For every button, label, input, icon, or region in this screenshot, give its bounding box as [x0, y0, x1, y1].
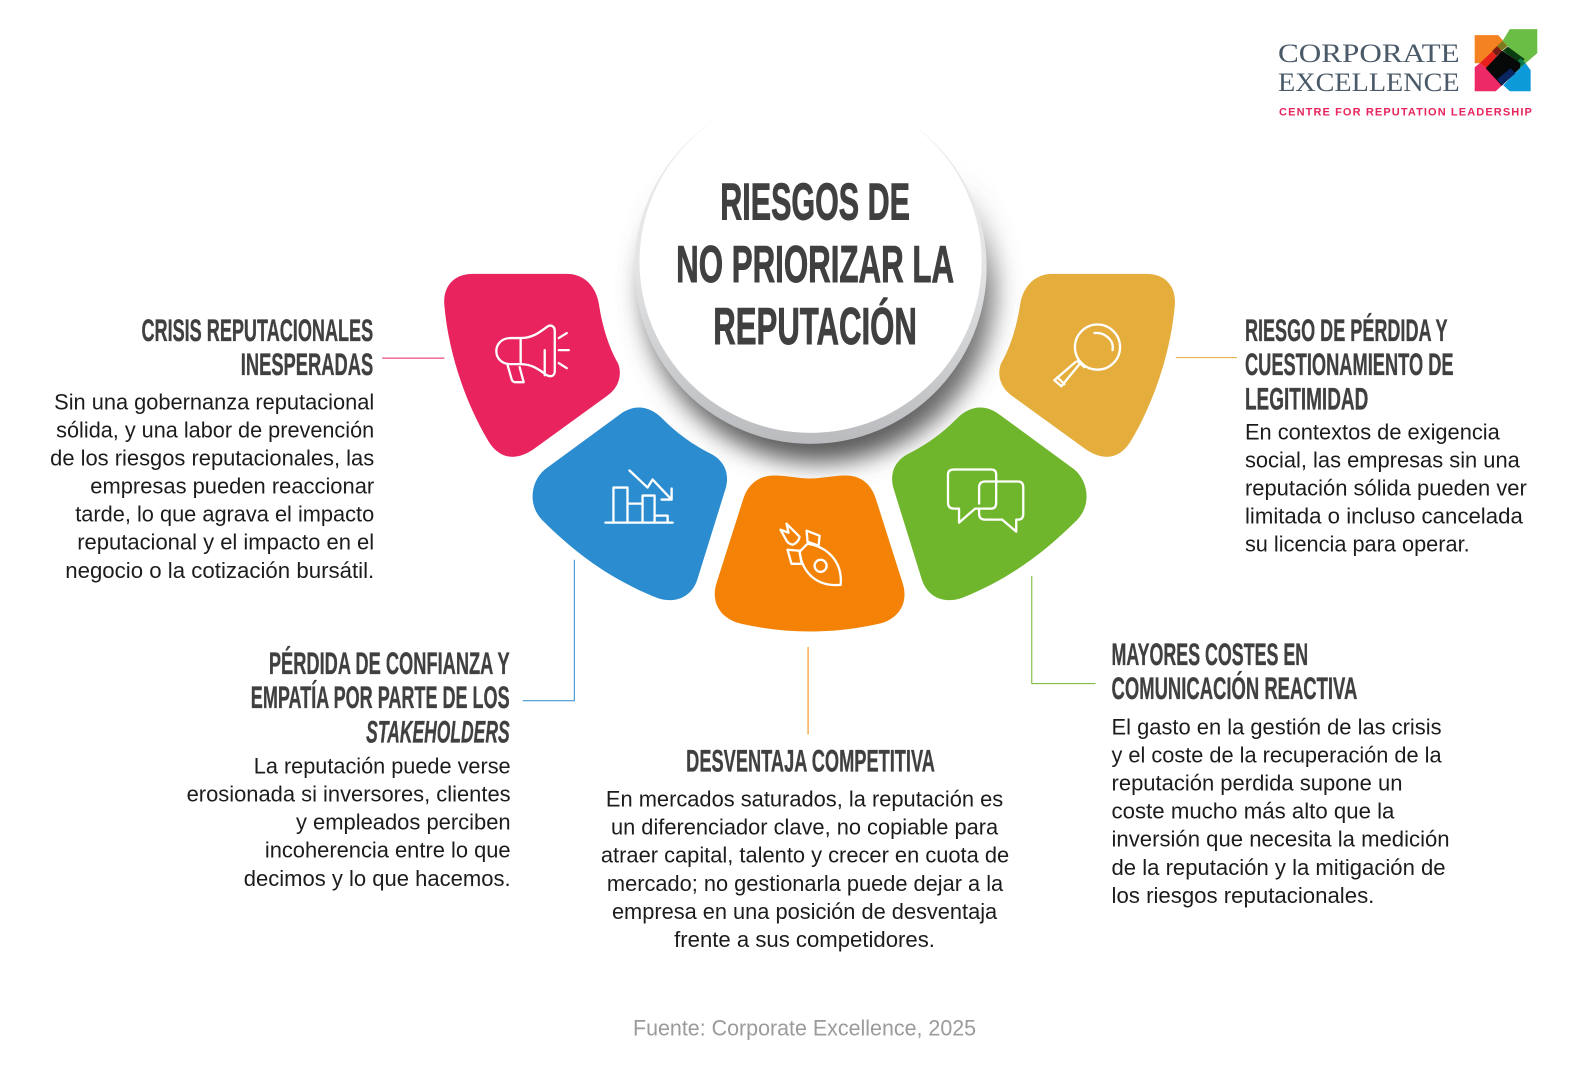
- body: costes: coste mucho más alto que la: [1112, 799, 1395, 824]
- title: REPUTACIÓN: [713, 298, 917, 356]
- heading: confianza: [251, 646, 510, 749]
- panel: legitimidad shape: [999, 274, 1175, 457]
- text block: confianza: [187, 646, 511, 891]
- title: RIESGOS DE: [720, 174, 910, 232]
- heading: desventaja: DESVENTAJA COMPETITIVA: [686, 743, 935, 778]
- heading: costes: COMUNICACIÓN REACTIVA: [1112, 670, 1357, 706]
- title: [676, 174, 954, 356]
- text block: crisis: [50, 313, 374, 583]
- icon: speech bubbles: [948, 469, 1023, 532]
- icon: rocket: [780, 524, 841, 585]
- body: confianza: y empleados perciben: [296, 810, 511, 835]
- body: crisis: [50, 389, 374, 583]
- source note: Fuente: Corporate Excellence, 2025: [633, 1015, 976, 1040]
- heading: crisis: INESPERADAS: [241, 347, 373, 382]
- connector: crisis: [382, 357, 444, 359]
- heading: legitimidad: [1245, 313, 1454, 416]
- body: crisis: de los riesgos reputacionales, las: [50, 445, 374, 470]
- body: costes: inversión que necesita la medición: [1112, 827, 1450, 852]
- heading: legitimidad: LEGITIMIDAD: [1245, 381, 1368, 416]
- body: crisis: tarde, lo que agrava el impacto: [75, 502, 374, 527]
- connector: confianza: [523, 560, 574, 701]
- text block: costes: [1112, 637, 1450, 908]
- body: confianza: La reputación puede verse: [254, 753, 511, 778]
- connector: costes: [1032, 576, 1095, 684]
- icon: magnifier: [1054, 325, 1120, 386]
- body: costes: y el coste de la recuperación de la: [1112, 742, 1442, 767]
- body: desventaja: empresa en una posición de desventaja: [612, 899, 998, 924]
- connector: legitimidad: [1176, 357, 1237, 359]
- body: costes: El gasto en la gestión de las crisis: [1112, 714, 1442, 739]
- body: legitimidad: En contextos de exigencia: [1245, 419, 1500, 444]
- heading: confianza: EMPATÍA POR PARTE DE LOS: [251, 680, 510, 715]
- body: costes: los riesgos reputacionales.: [1112, 883, 1374, 908]
- connector: desventaja: [807, 647, 809, 734]
- logo tagline: CENTRE FOR REPUTATION LEADERSHIP: [1279, 106, 1532, 118]
- panel: confianza shape: [533, 407, 727, 600]
- body: legitimidad: social, las empresas sin una: [1245, 447, 1521, 472]
- logo mark: [1475, 29, 1537, 91]
- central circle: [635, 91, 996, 462]
- body: legitimidad: [1245, 419, 1527, 557]
- logo wordmark: EXCELLENCE: [1278, 68, 1460, 97]
- icon: megaphone: [496, 326, 569, 382]
- logo wordmark: CORPORATE: [1278, 39, 1460, 68]
- body: desventaja: mercado; no gestionarla puede dejar a la: [607, 871, 1004, 896]
- body: confianza: [187, 753, 511, 891]
- logo wordmark: [1278, 39, 1460, 97]
- body: costes: [1112, 714, 1450, 908]
- icon: falling chart: [605, 470, 673, 523]
- text block: desventaja: [601, 743, 1009, 952]
- body: legitimidad: su licencia para operar.: [1245, 532, 1470, 557]
- text block: legitimidad: [1245, 313, 1527, 557]
- body: crisis: reputacional y el impacto en el: [77, 530, 374, 555]
- body: desventaja: [601, 787, 1009, 952]
- body: crisis: Sin una gobernanza reputacional: [54, 389, 374, 414]
- body: crisis: negocio o la cotización bursátil.: [65, 558, 374, 583]
- circle shadow: [641, 107, 996, 462]
- body: confianza: decimos y lo que hacemos.: [244, 866, 511, 891]
- body: desventaja: un diferenciador clave, no copiable para: [611, 815, 999, 840]
- body: desventaja: frente a sus competidores.: [674, 927, 935, 952]
- heading: crisis: CRISIS REPUTACIONALES: [141, 313, 373, 348]
- panel: desventaja shape: [715, 476, 905, 632]
- heading: confianza: STAKEHOLDERS: [366, 714, 510, 749]
- logo: [1278, 29, 1537, 118]
- panel: costes shape: [892, 407, 1087, 600]
- circle face: [640, 91, 982, 433]
- heading: costes: MAYORES COSTES EN: [1112, 637, 1308, 672]
- heading: confianza: PÉRDIDA DE CONFIANZA Y: [269, 646, 510, 681]
- heading: costes: [1112, 637, 1357, 706]
- body: costes: reputación perdida supone un: [1112, 771, 1402, 796]
- panel: crisis shape: [444, 274, 620, 457]
- body: legitimidad: reputación sólida pueden ver: [1245, 476, 1527, 501]
- body: costes: de la reputación y la mitigación de: [1112, 855, 1446, 880]
- body: desventaja: En mercados saturados, la reputación es: [606, 787, 1003, 812]
- body: crisis: sólida, y una labor de prevención: [56, 417, 374, 442]
- body: confianza: erosionada si inversores, clientes: [187, 782, 511, 807]
- body: confianza: incoherencia entre lo que: [265, 838, 511, 863]
- body: desventaja: atraer capital, talento y crecer en cuota de: [601, 843, 1009, 868]
- heading: crisis: [141, 313, 373, 382]
- title: NO PRIORIZAR LA: [676, 236, 954, 294]
- circle ring: [635, 92, 987, 444]
- body: legitimidad: limitada o incluso cancelada: [1245, 504, 1524, 529]
- body: crisis: empresas pueden reaccionar: [90, 474, 374, 499]
